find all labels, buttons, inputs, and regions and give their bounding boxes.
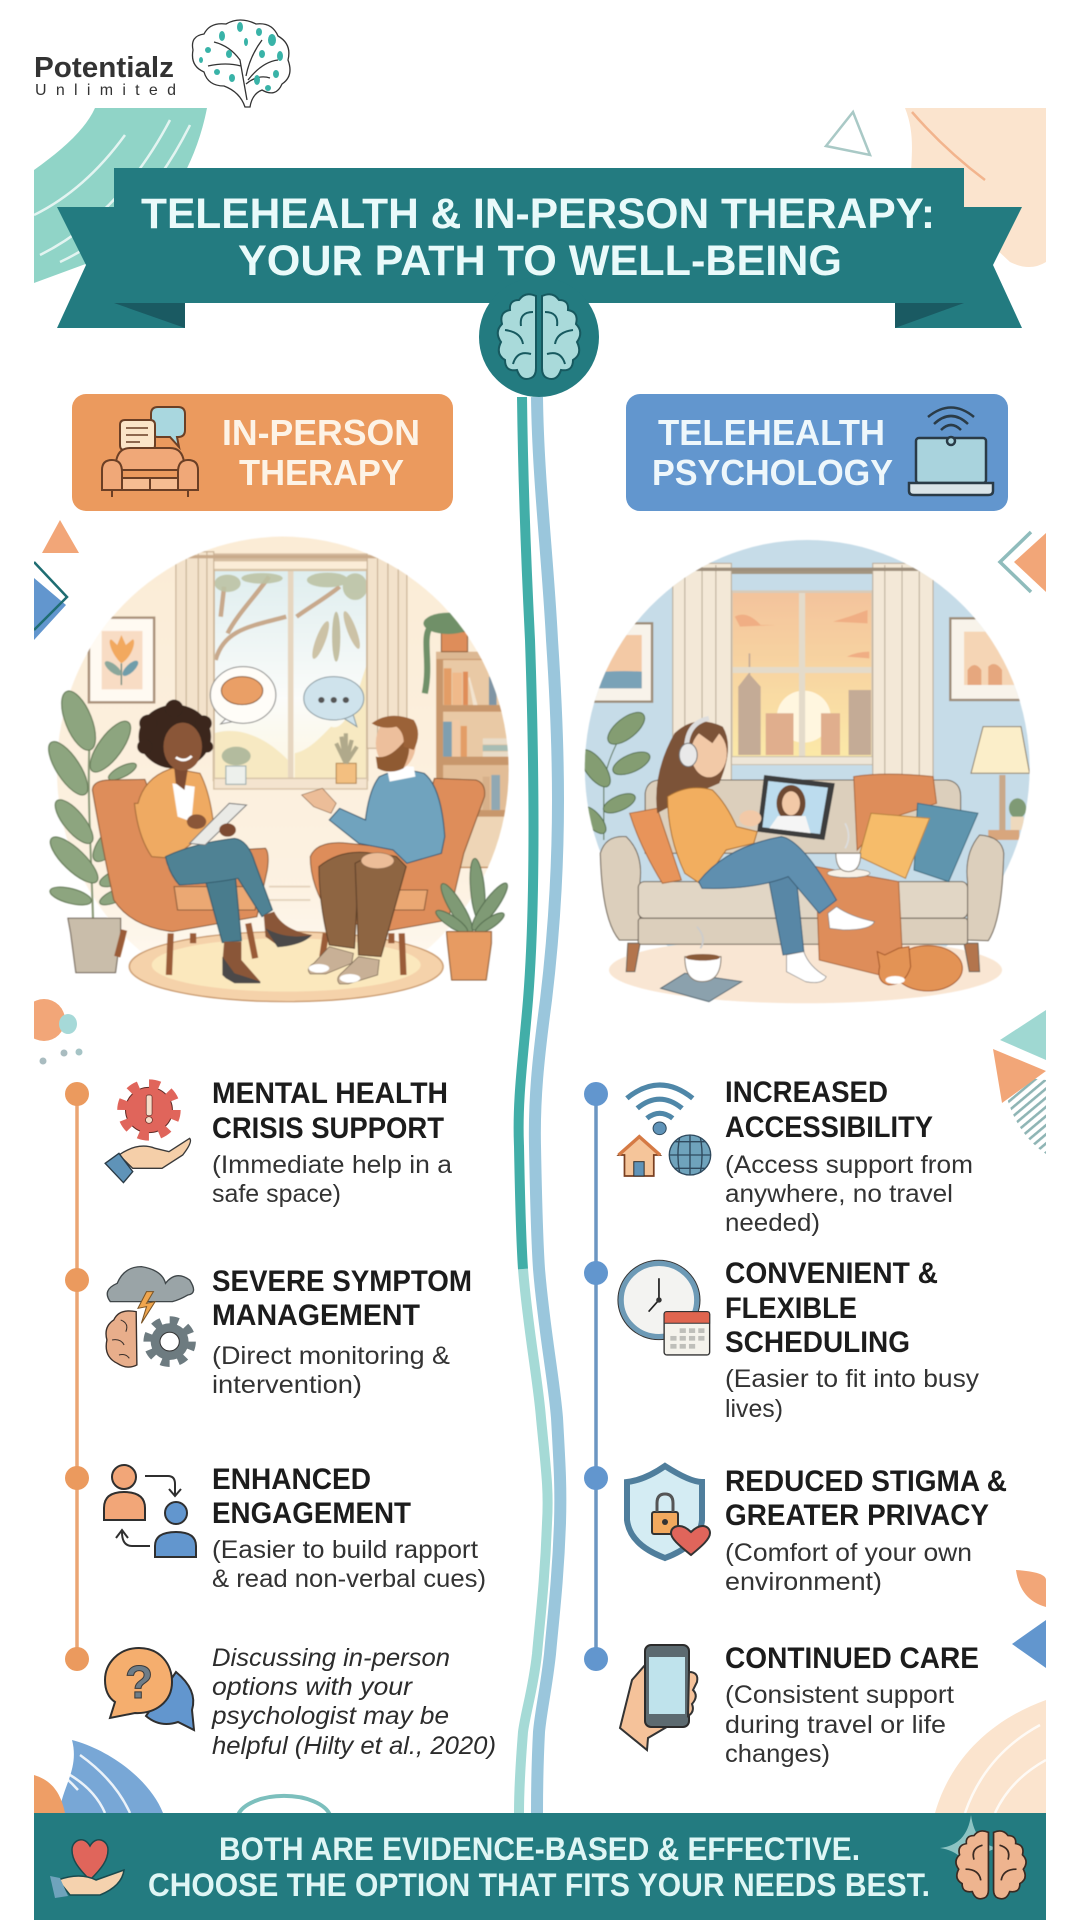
title banner: YOUR PATH TO WELL-BEING [238,237,842,285]
shape: outlined triangle [826,112,870,155]
item: continued care: (Consistent support [725,1681,954,1709]
client chair [310,778,485,975]
shape: blue diamond left [34,562,67,640]
icon: wifi, house and globe [619,1085,711,1176]
icon: hand holding phone [620,1645,697,1750]
item: continued care: during travel or life [725,1711,946,1739]
item: increased accessibility: ACCESSIBILITY [725,1111,933,1144]
item: discussing options note: options with your [212,1673,414,1701]
trousers [319,852,406,957]
item: increased accessibility: anywhere, no travel [725,1180,953,1208]
clipboard [190,803,247,845]
pill: telehealth psychology: PSYCHOLOGY [652,452,893,493]
window [214,553,368,789]
picture right [950,618,1033,700]
label text: TELEHEALTH [658,412,885,453]
timeline: telehealth benefits [584,1082,608,1671]
jeans [768,867,804,955]
item: discussing options note [105,1644,496,1760]
icon: two people with arrows [104,1465,196,1557]
brush: peach top-right [905,108,1046,267]
hair [137,700,213,769]
item: mental health crisis support: safe space) [212,1180,341,1208]
head [386,765,415,782]
saucer cup [827,823,870,878]
icon: alert gear on hand [105,1084,191,1183]
pill: in-person therapy: THERAPY [239,452,404,493]
logo: Potentialz Unlimited: Potentialz [34,52,174,84]
item: increased accessibility [619,1076,973,1237]
item: enhanced engagement: ENHANCED [212,1463,371,1496]
plant left [584,711,651,840]
therapist figure [134,700,312,983]
picture left [594,622,654,704]
item: convenient and flexible scheduling: lives) [725,1395,783,1423]
brush: teal top-left [34,108,207,283]
title banner [57,168,1022,397]
socks [828,907,874,930]
illustration: in-person session [42,533,514,1007]
icon: brain tree [192,20,290,107]
item: convenient and flexible scheduling [618,1257,980,1423]
icon: question speech bubbles [105,1648,194,1730]
picture [89,618,154,702]
shape: peach half circle [1016,1570,1046,1607]
item: severe symptom management: SEVERE SYMPTOM [212,1265,472,1298]
icon: heart over hand [50,1840,124,1898]
blazer [134,768,214,858]
rug [129,932,443,1002]
timeline: in-person benefits [65,1082,89,1671]
icon: brain [956,1831,1026,1899]
window [731,570,873,765]
brain badge [479,277,599,397]
pot left [68,918,121,973]
ribbon main [114,168,964,303]
item: mental health crisis support [105,1077,452,1208]
item: enhanced engagement [104,1463,486,1593]
wall trim [269,887,310,900]
sweater [329,771,445,863]
woman on sofa [656,718,874,983]
hair [656,721,728,813]
item: reduced stigma and privacy: GREATER PRIVACY [725,1499,989,1532]
sweater [668,788,757,885]
item: continued care [620,1642,979,1768]
brush: orange bottom-left [34,1775,65,1813]
item: convenient and flexible scheduling: CONVENIENT & [725,1257,938,1290]
brush: peach bottom-right [935,1700,1046,1813]
item: enhanced engagement: (Easier to build rapport [212,1536,478,1564]
illustration: telehealth at home [574,537,1037,1003]
cat [877,946,962,991]
item: reduced stigma and privacy: environment) [725,1568,882,1596]
headphones [679,718,709,767]
throw blanket [816,774,937,975]
item: enhanced engagement: & read non-verbal cues) [212,1565,486,1593]
icon: clock and calendar [618,1260,710,1355]
item: enhanced engagement: ENGAGEMENT [212,1497,411,1530]
pillows [630,808,681,883]
shape: orange triangle [42,520,79,553]
icon: shield, lock and heart [627,1466,710,1558]
cushions right [859,803,978,882]
lamp [971,727,1030,840]
curtains [166,552,417,748]
icon: sparkle [940,1815,999,1880]
face [691,729,727,777]
item: reduced stigma and privacy: REDUCED STIGMA & [725,1465,1007,1498]
jeans [203,867,241,943]
item: mental health crisis support: CRISIS SUPPORT [212,1112,444,1145]
client figure [302,716,445,984]
shape: peach blob with dots [34,999,82,1064]
large plant left [42,687,141,923]
curtains [673,563,933,803]
label text: IN-PERSON [222,412,420,453]
floor [609,937,1002,1003]
title text: TELEHEALTH & IN-PERSON THERAPY: [141,190,935,238]
logo: Potentialz Unlimited [34,20,290,107]
item: mental health crisis support: MENTAL HEALTH [212,1077,448,1110]
item: convenient and flexible scheduling: SCHEDULING [725,1326,910,1359]
icon: couch and speech bubbles [102,407,198,497]
sofa [600,780,1004,972]
shape: geometric cluster right [993,1010,1046,1154]
shoes [308,947,353,974]
bookshelf [436,652,510,868]
book and cup [661,927,742,1002]
item: severe symptom management: intervention) [212,1371,362,1399]
speech bubble: dots [304,677,364,727]
shape: teal arc [238,1796,330,1815]
therapist chair [92,779,268,975]
feet [222,942,260,982]
speech bubble: brain [210,667,276,724]
item: discussing options note: Discussing in-person [212,1644,450,1672]
item: severe symptom management: (Direct monitoring & [212,1342,450,1370]
pill: in-person therapy [72,394,453,511]
central flowing lines [519,397,560,1813]
item: increased accessibility: needed) [725,1209,820,1237]
footer band [34,1813,1046,1920]
right floor plant [433,858,512,980]
ribbon tails [57,207,1022,328]
top-shelf plant [423,613,473,693]
item: convenient and flexible scheduling: (Easier to fit into busy [725,1365,980,1393]
item: discussing options note: helpful (Hilty et al., 2020) [212,1732,496,1760]
window plants [222,733,357,784]
brush: blue bottom-left [62,1740,163,1813]
room background [52,533,514,1007]
tablet [739,775,835,840]
shape: peach diamond right [1000,532,1046,592]
item: convenient and flexible scheduling: FLEXIBLE [725,1292,857,1325]
shirt [172,783,195,822]
item: increased accessibility: INCREASED [725,1076,888,1109]
item: severe symptom management [106,1265,472,1399]
shape: blue diamond lower right [1012,1620,1046,1668]
item: continued care: changes) [725,1740,830,1768]
icon: laptop with wifi [909,408,993,495]
face [174,767,188,790]
item: reduced stigma and privacy [627,1465,1007,1596]
footer text: BOTH ARE EVIDENCE-BASED & EFFECTIVE. [219,1831,860,1867]
item: continued care: CONTINUED CARE [725,1642,979,1675]
room [574,537,1037,950]
hands [302,788,336,813]
item: mental health crisis support: (Immediate help in a [212,1151,452,1179]
logo: Potentialz Unlimited: Unlimited [35,82,176,99]
item: severe symptom management: MANAGEMENT [212,1299,420,1332]
pill: telehealth psychology [626,394,1008,511]
item: reduced stigma and privacy: (Comfort of your own [725,1539,972,1567]
icon: question speech bubbles: ? [125,1656,153,1708]
icon: storm cloud, brain and gear [106,1267,194,1367]
item: discussing options note: psychologist may be [211,1702,449,1730]
footer band: CHOOSE THE OPTION THAT FITS YOUR NEEDS BEST. [148,1867,930,1903]
item: increased accessibility: (Access support from [725,1151,973,1179]
